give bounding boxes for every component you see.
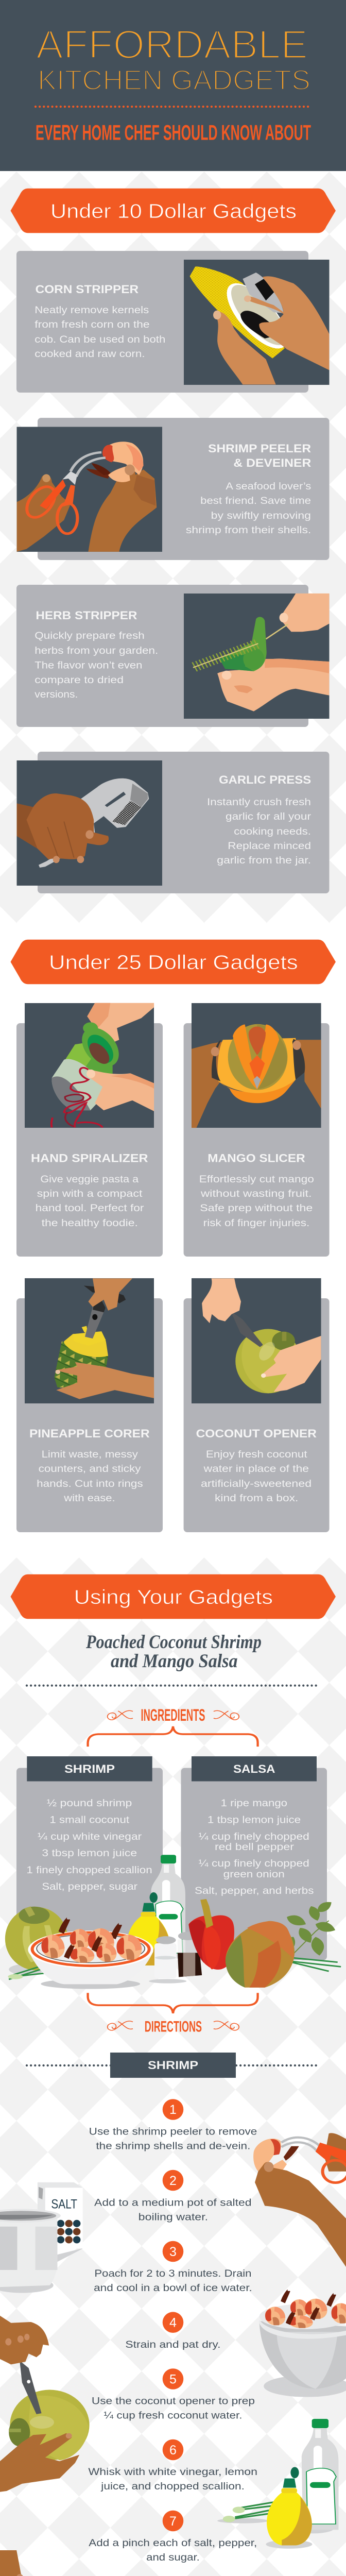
step 2: boiling water.: [139, 2212, 208, 2223]
panel: garlic press: [16, 752, 330, 893]
description: herbs from your garden.: [34, 646, 158, 656]
panel: shrimp ingredients: [16, 1756, 163, 1960]
ingredient list: Salt, pepper, and herbs: [195, 1886, 314, 1896]
description: spin with a compact: [37, 1189, 143, 1199]
description: hands. Cut into rings: [37, 1479, 143, 1489]
description: best friend. Save time: [200, 496, 311, 506]
illustration: mango slicer: [192, 1024, 321, 1128]
description: Quickly prepare fresh: [34, 631, 145, 641]
description: artificially-sweetened: [201, 1479, 312, 1489]
panel: hand spiralizer: [16, 1003, 163, 1257]
heading: SHRIMP: [64, 1762, 115, 1775]
illustration: vinegar, lemon juice and scallions: [217, 2419, 339, 2549]
description: hand tool. Perfect for: [36, 1203, 144, 1214]
step 2: 2: [169, 2174, 177, 2188]
description: garlic for all your: [226, 811, 312, 822]
description: Limit waste, messy: [42, 1449, 138, 1460]
description: kind from a box.: [215, 1493, 298, 1504]
description: versions.: [34, 689, 78, 700]
description: The flavor won’t even: [34, 660, 142, 671]
description: garlic from the jar.: [217, 855, 311, 866]
patterned background: recipe section: [0, 1557, 346, 2576]
step 3: Poach for 2 to 3 minutes. Drain: [94, 2268, 251, 2279]
description: by swiftly removing: [211, 511, 311, 521]
description: [37, 1449, 143, 1504]
description: Enjoy fresh coconut: [206, 1449, 307, 1460]
ingredient list: [195, 1798, 314, 1896]
ingredient list: Salt, pepper, sugar: [42, 1882, 138, 1892]
recipe title: and Mango Salsa: [111, 1651, 238, 1672]
description: Effortlessly cut mango: [199, 1174, 314, 1185]
step 1: Use the shrimp peeler to remove: [89, 2127, 257, 2138]
step 5: Use the coconut opener to prep: [92, 2396, 255, 2407]
brace: directions: [88, 1993, 258, 2013]
ingredient list: ¼ cup white vinegar: [38, 1832, 142, 1842]
step 3: [94, 2241, 252, 2294]
description: risk of finger injuries.: [203, 1218, 309, 1229]
ingredient list: ¼ cup finely chopped: [199, 1858, 309, 1869]
step 4: [125, 2312, 220, 2350]
banner: using your gadgets: Using Your Gadgets: [74, 1586, 273, 1608]
step 4: 4: [169, 2315, 177, 2330]
illustration: ingredients still life: [5, 1855, 341, 1989]
step 6: [88, 2439, 257, 2492]
step 6: juice, and chopped scallion.: [100, 2481, 245, 2492]
ingredient list: ¼ cup finely chopped: [199, 1832, 309, 1842]
illustration: hands peeling shrimp: [17, 442, 157, 552]
step 1: the shrimp shells and de-vein.: [96, 2141, 250, 2152]
step 6: 6: [169, 2443, 177, 2458]
description: with ease.: [63, 1493, 115, 1504]
step 7: 7: [169, 2514, 177, 2529]
panel: salsa ingredients: [181, 1756, 327, 1960]
description: A seafood lover’s: [226, 481, 311, 492]
step 7: and sugar.: [146, 2552, 200, 2563]
description: [201, 1449, 312, 1504]
ingredient list: 1 ripe mango: [221, 1798, 287, 1809]
heading: & DEVEINER: [233, 456, 311, 469]
section tag: shrimp: [110, 2053, 236, 2078]
description: shrimp from their shells.: [186, 525, 311, 536]
heading: GARLIC PRESS: [219, 773, 311, 786]
description: cob. Can be used on both: [34, 334, 165, 345]
description: [34, 305, 165, 360]
step 5: [92, 2368, 255, 2421]
heading: SHRIMP PEELER: [208, 442, 311, 455]
banner: under 25 dollar gadgets: [10, 940, 336, 984]
step 4: Strain and pat dry.: [125, 2340, 220, 2350]
description: [36, 1174, 144, 1229]
description: counters, and sticky: [39, 1464, 141, 1475]
description: Replace minced: [228, 841, 311, 852]
header panel: [0, 0, 346, 171]
panel: pineapple corer: [16, 1278, 163, 1532]
ingredient list: 1 tbsp lemon juice: [207, 1815, 301, 1826]
step 6: Whisk with white vinegar, lemon: [88, 2467, 257, 2478]
ingredient list: ½ pound shrimp: [47, 1798, 132, 1809]
panel: shrimp peeler and deveiner: [16, 418, 330, 560]
patterned background: gadgets section: [0, 172, 346, 923]
description: the healthy foodie.: [42, 1218, 138, 1229]
step 5: 5: [169, 2372, 177, 2386]
panel: mango slicer: [184, 1003, 330, 1257]
description: Give veggie pasta a: [40, 1174, 139, 1185]
illustration: hand mixing shrimp in bowl: [0, 2550, 85, 2576]
ingredient list: green onion: [223, 1869, 285, 1880]
panel: corn stripper: [16, 251, 330, 393]
ingredients heading: INGREDIENTS: [141, 1706, 205, 1724]
illustration: coconut opener: [202, 1278, 321, 1393]
step 7: Add a pinch each of salt, pepper,: [89, 2538, 257, 2549]
step 3: 3: [169, 2245, 177, 2259]
illustration: hand squeezing garlic press: [17, 778, 149, 868]
ingredients heading: [108, 1706, 239, 1724]
illustration: shrimp in strainer bowl: [260, 2289, 346, 2397]
ingredient list: red bell pepper: [215, 1842, 295, 1853]
heading: HAND SPIRALIZER: [31, 1151, 148, 1164]
directions heading: DIRECTIONS: [145, 2019, 202, 2036]
illustration: salt box and pot: SALT: [51, 2197, 77, 2212]
description: [207, 797, 312, 866]
banner: under 10 dollar gadgets: Under 10 Dollar Gadgets: [50, 200, 297, 223]
step 5: ¼ cup fresh coconut water.: [103, 2411, 242, 2421]
ingredient list: 3 tbsp lemon juice: [42, 1848, 137, 1859]
description: [186, 481, 311, 536]
heading: SALSA: [233, 1762, 275, 1775]
step 2: Add to a medium pot of salted: [94, 2197, 252, 2208]
banner: under 10 dollar gadgets: [10, 189, 336, 233]
ingredient list: [26, 1798, 152, 1892]
heading: CORN STRIPPER: [36, 283, 139, 296]
brace: ingredients: [88, 1726, 258, 1747]
step 2: [94, 2170, 252, 2223]
description: water in place of the: [203, 1464, 309, 1475]
description: cooked and raw corn.: [34, 349, 145, 360]
title: KITCHEN GADGETS: [38, 64, 310, 96]
heading: [208, 442, 311, 469]
illustration: hand peeling shrimp: [253, 2133, 346, 2267]
recipe title: Poached Coconut Shrimp: [85, 1632, 262, 1653]
heading: MANGO SLICER: [207, 1151, 305, 1164]
title: AFFORDABLE: [36, 22, 308, 67]
heading: HERB STRIPPER: [36, 609, 137, 622]
title: [36, 22, 310, 96]
heading: PINEAPPLE CORER: [29, 1427, 150, 1440]
illustration: coconut and opener: [0, 2316, 90, 2492]
step 1: [89, 2099, 257, 2152]
heading: COCONUT OPENER: [196, 1427, 317, 1440]
illustration: hand spiralizer: [51, 1003, 154, 1127]
description: Safe prep without the: [200, 1203, 313, 1214]
banner: under 25 dollar gadgets: Under 25 Dollar Gadgets: [49, 952, 298, 974]
description: [34, 631, 158, 700]
description: compare to dried: [34, 675, 124, 686]
illustration: salt box and pot: [0, 2182, 83, 2293]
step 7: [89, 2511, 257, 2563]
banner: using your gadgets: [10, 1574, 336, 1619]
description: without wasting fruit.: [200, 1189, 312, 1199]
icon: flourishes: [108, 1710, 239, 1720]
ingredient list: 1 small coconut: [49, 1815, 130, 1826]
section tag: shrimp: SHRIMP: [148, 2059, 198, 2072]
step 3: and cool in a bowl of ice water.: [94, 2283, 252, 2294]
illustration: pineapple corer: [54, 1278, 154, 1399]
description: from fresh corn on the: [34, 319, 150, 330]
step 1: 1: [169, 2103, 177, 2117]
illustration: herb stripper in hands: [193, 594, 329, 711]
illustration: corn stripper in hands: [190, 266, 329, 384]
description: Neatly remove kernels: [34, 305, 149, 316]
panel: herb stripper: [16, 585, 330, 727]
recipe title: [85, 1632, 262, 1672]
description: cooking needs.: [234, 826, 311, 837]
icon: flourishes: [108, 2021, 239, 2030]
description: [199, 1174, 314, 1229]
ingredient list: 1 finely chopped scallion: [26, 1865, 152, 1876]
panel: coconut opener: [184, 1278, 330, 1532]
description: Instantly crush fresh: [207, 797, 311, 808]
